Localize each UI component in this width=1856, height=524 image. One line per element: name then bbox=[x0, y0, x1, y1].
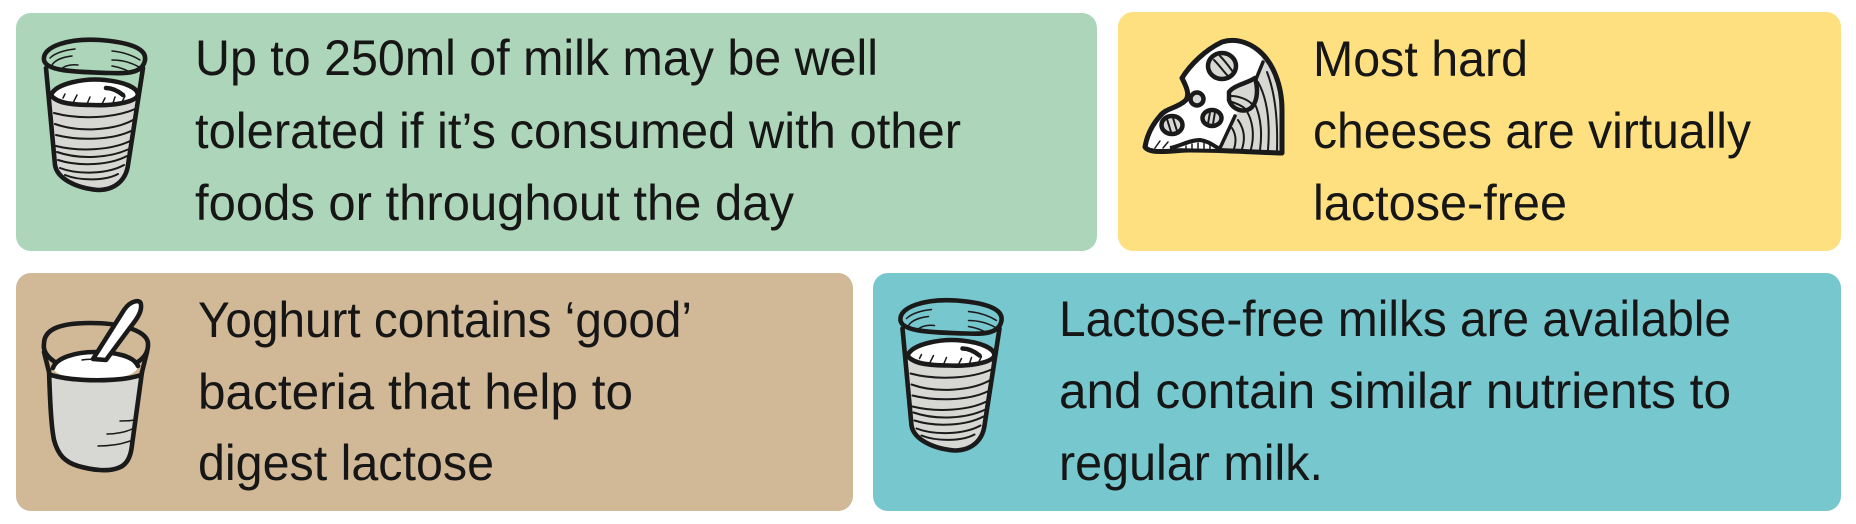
text: milk with food: foods or throughout the day bbox=[195, 175, 794, 231]
text: milk with food bbox=[195, 30, 961, 231]
text: yoghurt: Yoghurt contains ‘good’ bbox=[198, 292, 692, 348]
icon: glass of milk bbox=[44, 40, 145, 190]
panel: milk with food bbox=[16, 13, 1097, 251]
text: hard cheese: lactose-free bbox=[1313, 175, 1567, 231]
text: lactose-free milk: Lactose-free milks are available bbox=[1059, 291, 1731, 347]
text: milk with food: tolerated if it’s consumed with other bbox=[195, 103, 961, 159]
text: yoghurt bbox=[198, 292, 692, 491]
panel: lactose-free milk bbox=[873, 273, 1841, 511]
text: lactose-free milk: and contain similar nutrients to bbox=[1059, 363, 1731, 419]
text: yoghurt: bacteria that help to bbox=[198, 364, 633, 420]
icon: glass of lactose-free milk bbox=[900, 300, 1002, 450]
icon: cheese wedge bbox=[1145, 40, 1282, 153]
text: hard cheese: Most hard bbox=[1313, 31, 1528, 87]
text: milk with food: Up to 250ml of milk may be well bbox=[195, 30, 878, 86]
text: lactose-free milk bbox=[1059, 291, 1731, 491]
text: lactose-free milk: regular milk. bbox=[1059, 435, 1323, 491]
icon: yoghurt pot with spoon bbox=[44, 301, 148, 470]
text: yoghurt: digest lactose bbox=[198, 435, 494, 491]
panel: hard cheese bbox=[1118, 12, 1841, 251]
text: hard cheese: cheeses are virtually bbox=[1313, 103, 1751, 159]
panel: yoghurt bbox=[16, 273, 853, 511]
text: hard cheese bbox=[1313, 31, 1751, 231]
